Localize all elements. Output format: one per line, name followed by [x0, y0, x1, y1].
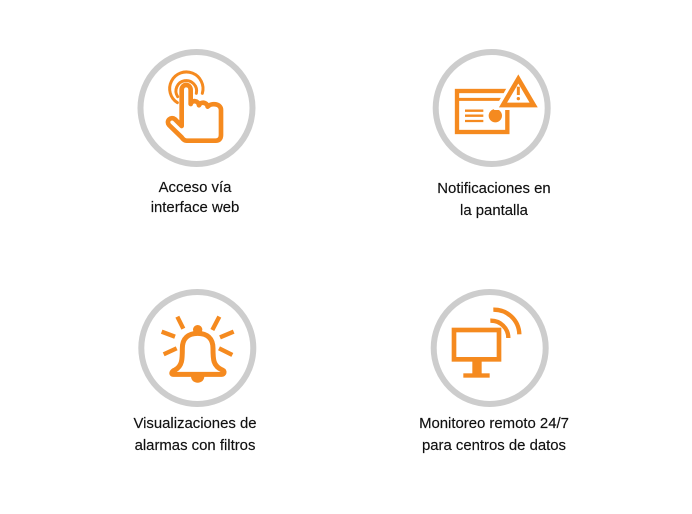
- caption: remote monitoring: [419, 416, 569, 454]
- caption: web access: interface web: [151, 200, 239, 216]
- caption: web access: [151, 180, 239, 216]
- caption: alarm visualizations: Visualizaciones de: [133, 416, 257, 432]
- caption: remote monitoring: para centros de datos: [422, 438, 566, 454]
- caption: screen notifications: Notificaciones en: [437, 181, 551, 197]
- caption: remote monitoring: Monitoreo remoto 24/7: [419, 416, 569, 432]
- caption: screen notifications: [437, 181, 551, 219]
- icon: remote monitor with signal in circle: [434, 292, 546, 404]
- caption: alarm visualizations: [133, 416, 257, 454]
- icon: alarm bell in circle: [141, 292, 253, 404]
- caption: alarm visualizations: alarmas con filtros: [135, 438, 255, 454]
- caption: web access: Acceso vía: [159, 180, 231, 196]
- caption: screen notifications: la pantalla: [460, 203, 528, 219]
- icon: touch hand in circle: [140, 52, 252, 164]
- icon: screen alert in circle: [436, 52, 548, 164]
